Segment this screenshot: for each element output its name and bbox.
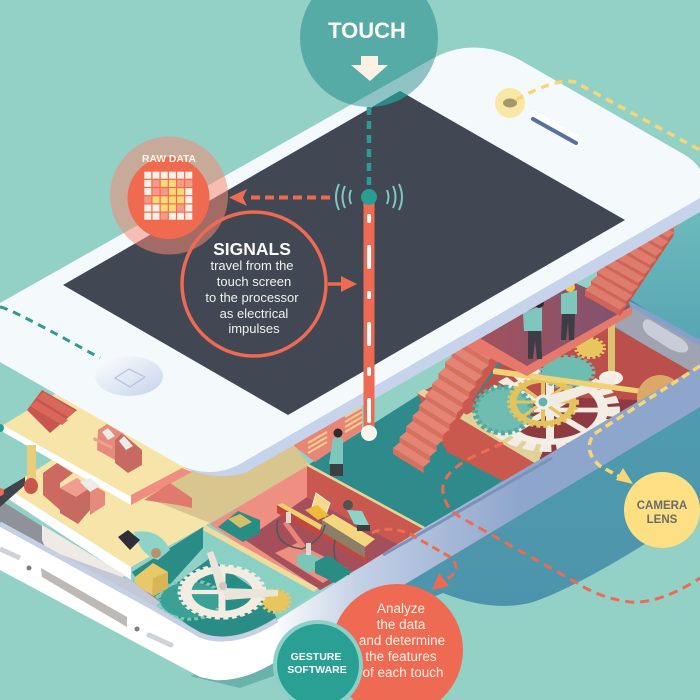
green shelves bbox=[218, 511, 260, 542]
gesture text: GESTURE bbox=[291, 651, 341, 663]
red dashed line two with arrowhead bbox=[372, 529, 456, 590]
gesture text: SOFTWARE bbox=[287, 664, 347, 676]
gear arms bbox=[207, 551, 278, 600]
right gear room bbox=[417, 322, 692, 481]
bar end knob bbox=[361, 425, 377, 441]
under stairs bbox=[144, 483, 192, 508]
charging port bbox=[41, 568, 127, 627]
small stairs bbox=[27, 390, 77, 433]
gear compartment bbox=[118, 525, 318, 642]
signals heading: SIGNALS bbox=[213, 239, 291, 259]
camera lens text: CAMERA bbox=[637, 500, 687, 512]
upper cream platform bbox=[3, 355, 200, 524]
red dashed line one bbox=[443, 443, 700, 602]
touch arrow bbox=[351, 56, 388, 81]
seated worker bbox=[343, 500, 370, 531]
grey side frame bbox=[612, 300, 700, 384]
desk room bbox=[210, 466, 425, 590]
phone glass bbox=[0, 48, 700, 472]
yellow gear bbox=[509, 378, 577, 426]
shadow under phone corner bbox=[190, 650, 285, 688]
signals body: as electrical bbox=[220, 306, 288, 321]
screw right bbox=[134, 626, 140, 632]
signals circle bbox=[182, 212, 326, 356]
touch node bbox=[361, 189, 377, 205]
golden pillar bbox=[608, 322, 615, 378]
yellow dashed line from front camera bbox=[516, 81, 700, 150]
phone body interior bbox=[0, 204, 700, 680]
yellow dashed line to camera lens bbox=[589, 366, 700, 484]
upper stairs bbox=[585, 204, 680, 316]
touch badge bbox=[300, 0, 438, 107]
analyze text: and determine bbox=[359, 633, 445, 648]
teal dashed line to home button bbox=[0, 307, 100, 358]
touch label: TOUCH bbox=[328, 18, 406, 43]
camera lens badge bbox=[624, 472, 700, 548]
worker left bbox=[523, 298, 544, 359]
signals body: touch screen bbox=[217, 274, 291, 289]
vibration waves bbox=[336, 184, 402, 210]
grey battery bay bbox=[0, 477, 160, 612]
phone glass side edge bbox=[180, 160, 700, 476]
axle bbox=[537, 396, 549, 408]
home button bbox=[95, 356, 163, 396]
phone shadow on table bbox=[330, 205, 700, 640]
front white face bbox=[0, 524, 285, 680]
camera lens marker bbox=[637, 375, 674, 402]
teal gear back bbox=[158, 581, 222, 619]
arrowhead yellow bbox=[616, 468, 633, 484]
upper mauve platform bbox=[463, 283, 632, 376]
drawer units bbox=[322, 514, 375, 558]
pillar bbox=[24, 445, 38, 494]
arrowhead red bbox=[432, 573, 449, 590]
desk bar bbox=[277, 503, 367, 563]
large white gear bbox=[180, 566, 264, 618]
upper cupboards bbox=[93, 424, 142, 473]
small yellow gear bbox=[262, 590, 290, 612]
teal dashed touch line bbox=[367, 107, 371, 190]
front camera with highlight bbox=[495, 88, 525, 118]
yellow box bbox=[135, 563, 168, 597]
analyze text: the data bbox=[377, 617, 426, 632]
white arm bbox=[540, 377, 614, 408]
white ratchet gear bbox=[488, 373, 612, 447]
speaker left bbox=[0, 549, 20, 558]
machine arms bbox=[277, 512, 352, 583]
camera lens text: LENS bbox=[647, 514, 678, 526]
gesture software badge bbox=[275, 622, 361, 700]
analyze circle bbox=[331, 584, 463, 700]
screen bbox=[63, 91, 625, 415]
analyze text: Analyze bbox=[377, 601, 425, 616]
analyze text: the features bbox=[365, 649, 437, 664]
rear teal gear bbox=[541, 356, 593, 388]
signals body: travel from the bbox=[210, 258, 294, 273]
small yellow gears bbox=[576, 338, 604, 358]
screw left bbox=[26, 566, 32, 570]
teal gear bbox=[475, 387, 531, 433]
signal bar bbox=[361, 203, 377, 441]
worker right bbox=[561, 282, 577, 340]
signals body: impulses bbox=[228, 321, 280, 336]
band inner slit bbox=[383, 458, 552, 555]
signals body: to the processor bbox=[205, 290, 299, 305]
speaker right bbox=[149, 635, 171, 645]
earpiece speaker bbox=[533, 114, 580, 143]
raw data label: RAW DATA bbox=[142, 154, 197, 165]
right metal side band bbox=[200, 365, 700, 680]
interior dark teal base bbox=[300, 280, 700, 530]
right gear room stairs bbox=[393, 325, 510, 473]
worker by wall bbox=[329, 428, 343, 476]
yellow long arm bbox=[493, 368, 657, 396]
left edge dots bbox=[0, 424, 4, 496]
raw data grid bbox=[144, 172, 192, 220]
yellow chair bbox=[305, 493, 330, 520]
crouching worker bbox=[118, 530, 170, 560]
raw data badge bbox=[110, 136, 228, 254]
lower cream floor bbox=[7, 440, 425, 580]
arrow to signal bar bbox=[328, 276, 357, 292]
lower cupboards bbox=[43, 463, 105, 524]
shutter wall bbox=[290, 403, 362, 462]
dashed arrow to raw data bbox=[229, 189, 330, 206]
analyze text: of each touch bbox=[362, 665, 444, 680]
arrowhead to raw data bbox=[229, 189, 247, 206]
